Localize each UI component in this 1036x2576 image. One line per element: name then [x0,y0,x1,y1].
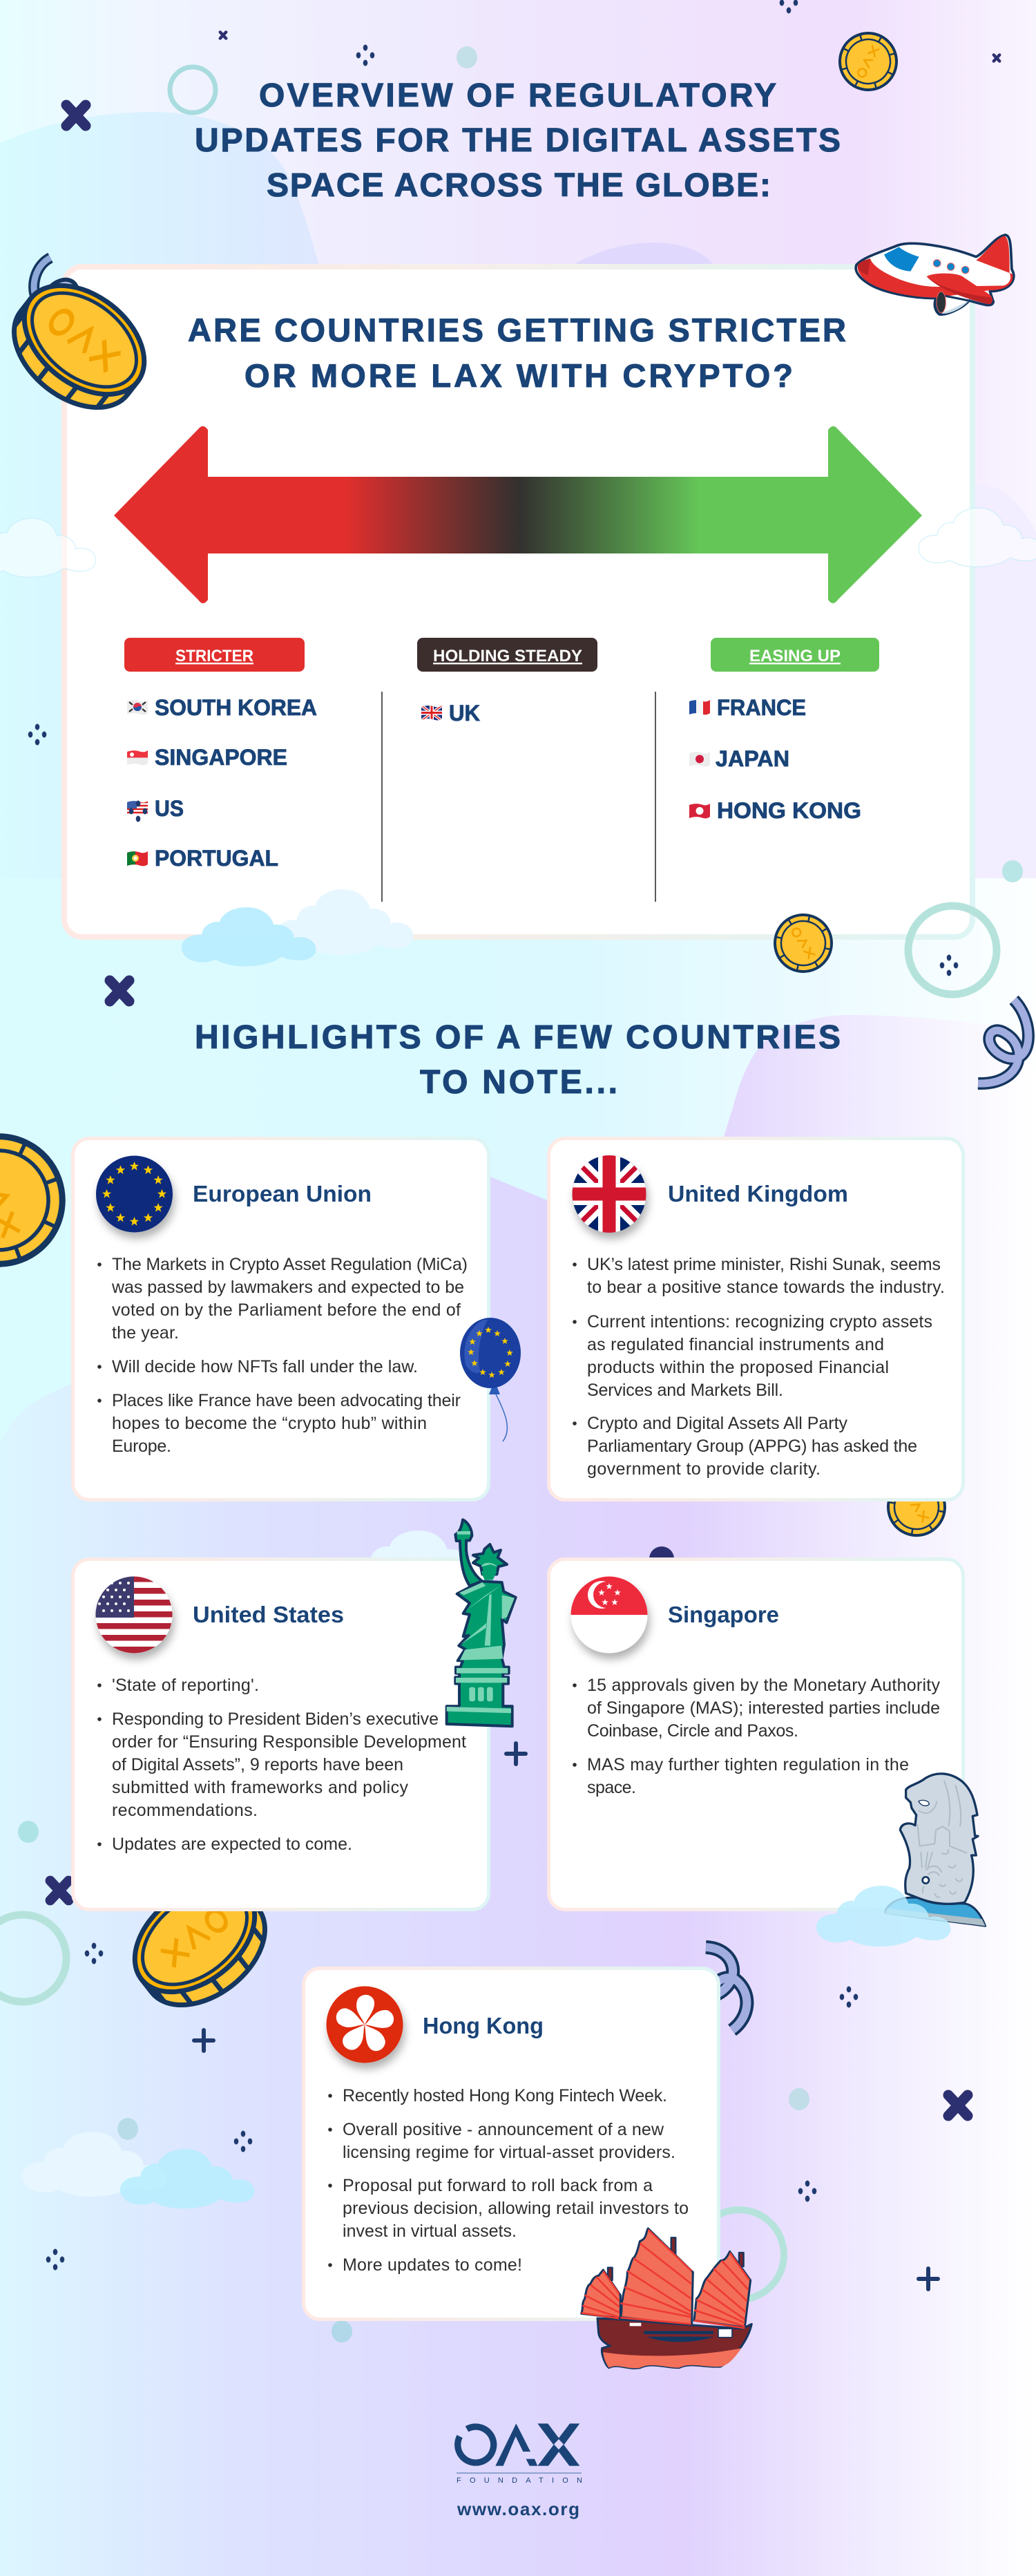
ring: behind Hong Kong card [694,2210,784,2300]
merlion [885,1774,986,1926]
cloud: pale under main card [276,889,413,955]
panel: stricter or lax [64,267,972,937]
panel: United Kingdom [548,1139,963,1499]
logo: OAX Foundation: FOUNDATION [457,2476,582,2485]
bullet list: UK’s latest prime minister, Rishi Sunak, seems [587,1255,941,1274]
bullet list: licensing regime for virtual-asset providers. [343,2143,675,2162]
bullet list: Current intentions: recognizing crypto assets [587,1312,932,1332]
panel: highlights heading: HIGHLIGHTS OF A FEW COUNTRIES [195,1019,841,1056]
card title: Singapore [668,1602,779,1627]
coin: flat lower [765,905,842,982]
pill: stricter [124,638,305,672]
bullet list: 'State of reporting'. [112,1676,259,1695]
bullet list: order for “Ensuring Responsible Development [112,1732,466,1752]
ribbon: behind Hong Kong card [706,1947,747,2030]
bullet list: More updates to come! [343,2255,522,2275]
list: easing countries: FRANCE [717,695,806,720]
bullet list: of Singapore (MAS); interested parties include [587,1698,940,1718]
panel: Hong Kong [304,1968,718,2319]
bullet list: The Markets in Crypto Asset Regulation (MiCa) [112,1255,468,1274]
bullet list: hopes to become the “crypto hub” within [112,1414,427,1433]
flag: UK [570,1154,648,1234]
bullet list: Will decide how NFTs fall under the law. [112,1357,418,1376]
pill: holding steady: HOLDING STEADY [433,647,582,665]
bullet list: Recently hosted Hong Kong Fintech Week. [343,2086,667,2105]
list: easing countries: JAPAN [716,746,789,771]
bullet list: Services and Markets Bill. [587,1381,783,1400]
bullet list: Coinbase, Circle and Paxos. [587,1721,798,1741]
coin: tilted under US card [114,1861,285,2027]
title: OVERVIEW OF REGULATORY [259,77,776,114]
list: easing countries [689,695,861,823]
list: holding steady countries: UK [449,701,480,726]
list: stricter countries: SOUTH KOREA [155,695,317,720]
bullet list: 15 approvals given by the Monetary Authority [587,1676,941,1695]
heading: OR MORE LAX WITH CRYPTO? [244,357,793,394]
bullet list: Europe. [112,1437,171,1456]
card title: European Union [193,1181,372,1206]
cloud: left [0,518,96,577]
bullet list: previous decision, allowing retail investors to [343,2199,689,2218]
list: holding steady countries [421,705,481,721]
bullet list: Overall positive - announcement of a new [343,2120,664,2139]
coin: cropped at left edge [0,1119,80,1282]
cloud: right [919,508,1036,567]
list: easing countries: HONG KONG [717,798,861,823]
bullet list: as regulated financial instruments and [587,1335,884,1354]
list: stricter countries: SINGAPORE [155,745,287,770]
bullet list: Responding to President Biden’s executive [112,1710,439,1729]
plane [856,235,1014,314]
bullet list: to bear a positive stance towards the industry. [587,1278,945,1297]
pill: easing up: EASING UP [749,647,841,665]
bullet list [97,1676,466,1854]
bullet list: Updates are expected to come. [112,1835,352,1854]
bullet list: was passed by lawmakers and expected to be [111,1278,464,1297]
dots in ring [940,955,958,976]
cloud: behind US card [349,1531,492,1594]
flag: Singapore [570,1576,648,1654]
title: SPACE ACROSS THE GLOBE: [267,167,771,204]
title: UPDATES FOR THE DIGITAL ASSETS [195,122,841,159]
ring: right [908,906,997,994]
balloon: EU [460,1318,521,1441]
bullet list: MAS may further tighten regulation in the [587,1755,909,1774]
bullet list: Crypto and Digital Assets All Party [587,1414,848,1433]
bullet list: invest in virtual assets. [343,2222,517,2241]
title [195,77,841,204]
bullet list: voted on by the Parliament before the end of [112,1300,461,1320]
bullet list: products within the proposed Financial [587,1358,889,1377]
circle: navy behind Singapore card [649,1546,674,1571]
panel: United States [73,1559,489,1910]
bullet list [573,1255,945,1479]
flag: US [95,1576,173,1654]
panel: Singapore [548,1559,963,1910]
bullet list: submitted with frameworks and policy [112,1778,409,1797]
coin: flat under UK card [877,1468,956,1546]
website: www.oax.org [457,2499,579,2519]
x mark: behind US card [50,1881,68,1900]
logo: OAX Foundation [457,2423,582,2485]
bullet list: Places like France have been advocating their [112,1391,461,1410]
panel: highlights heading: TO NOTE... [420,1064,617,1101]
flag: EU [95,1155,173,1233]
card title: Hong Kong [423,2013,544,2038]
junk ship [582,2228,751,2368]
bullet list: of Digital Assets”, 9 reports have been [112,1755,403,1774]
heading [188,312,846,394]
pill: stricter: STRICTER [175,647,253,665]
pill: easing up [711,638,879,672]
bullet list: the year. [112,1323,179,1343]
bullet list: recommendations. [112,1801,258,1820]
bullet list: space. [587,1778,636,1797]
bullet list: Proposal put forward to roll back from a [343,2176,653,2195]
bullet list [573,1676,941,1797]
bullet list: Parliamentary Group (APPG) has asked the [587,1437,917,1456]
list: stricter countries: PORTUGAL [155,846,278,871]
pill: holding steady [417,638,597,672]
double arrow [114,426,922,603]
coin: flat top right [830,23,906,100]
bullet list [328,2086,689,2275]
list: stricter countries [127,695,317,871]
bullet list: government to provide clarity. [587,1459,821,1479]
ring: lower left [0,1915,66,2002]
cloud: over merlion [816,1886,951,1947]
flag: Hong Kong [326,1986,403,2063]
card title: United Kingdom [668,1181,848,1206]
panel: highlights heading [195,1019,841,1101]
ribbon and coin: top left [0,258,165,430]
heading: ARE COUNTRIES GETTING STRICTER [188,312,846,348]
dots over US flag [129,800,147,822]
list: stricter countries: US [155,796,184,821]
panel: European Union [73,1139,489,1499]
ribbon: right [978,1000,1028,1083]
cloud: blue under main card [182,907,316,966]
clouds: left and bottom [22,2132,255,2208]
card title: United States [193,1602,344,1627]
bullet list [97,1255,468,1456]
statue of liberty [447,1519,516,1726]
